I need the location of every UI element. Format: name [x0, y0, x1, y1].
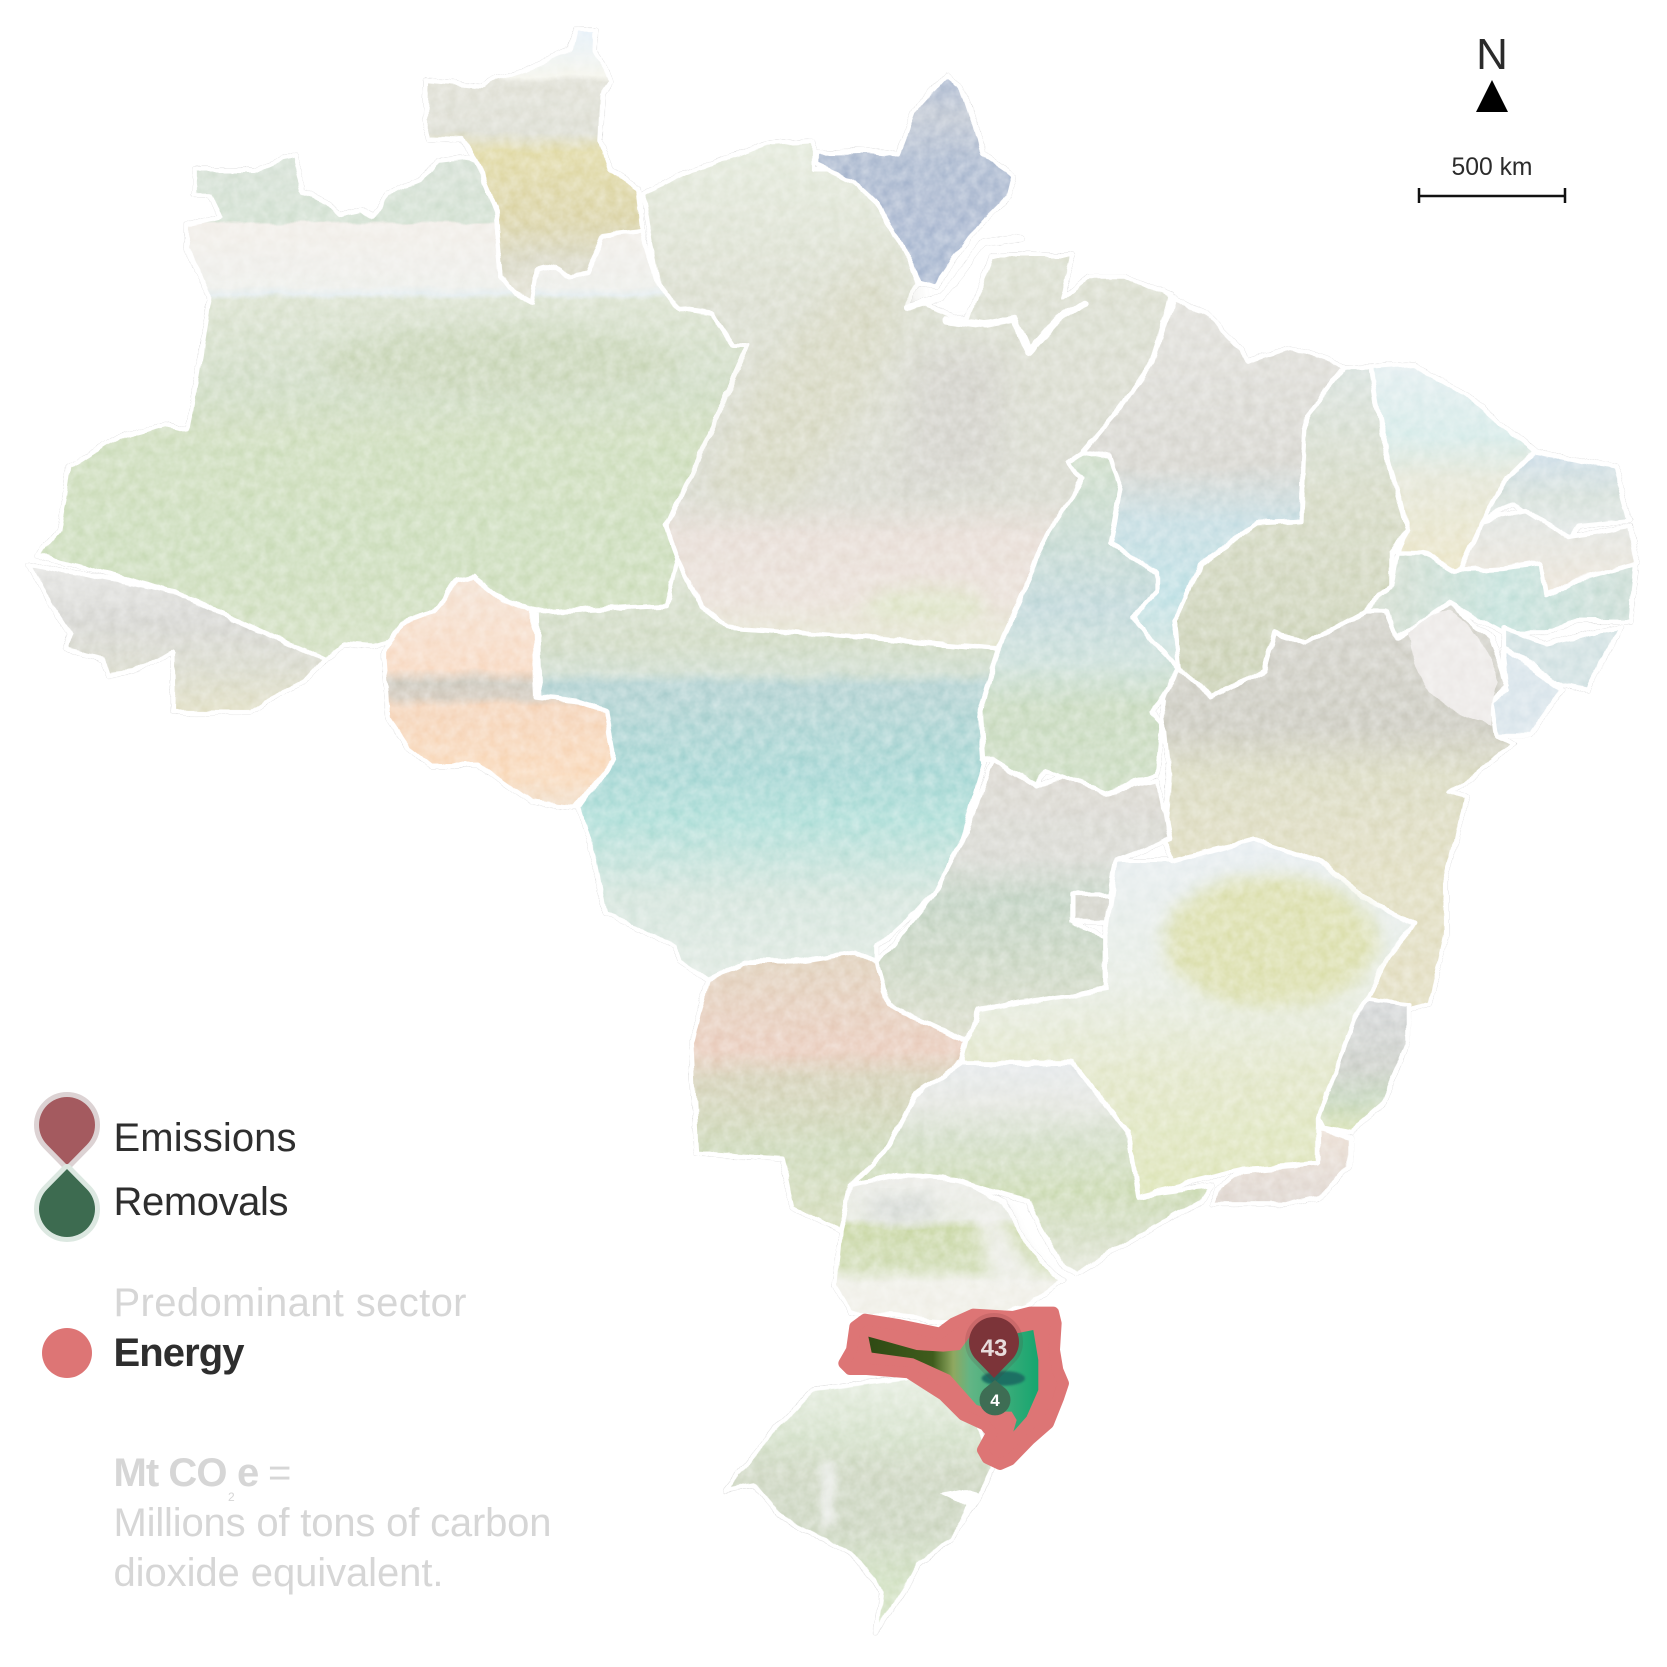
note: unit definition: =	[268, 1451, 291, 1495]
legend: removals	[39, 1169, 289, 1237]
state: Maranhao	[1083, 298, 1346, 670]
Parana detail: waterfall face	[870, 1195, 933, 1220]
Santa Catarina energy sector outline	[844, 1312, 1063, 1464]
state: Espirito Santo	[1318, 999, 1409, 1132]
state: Rio de Janeiro	[1212, 1127, 1350, 1204]
Bahia detail: pale cloud	[1408, 610, 1499, 725]
scale bar	[1419, 153, 1565, 203]
state: Mato Grosso	[537, 558, 998, 980]
state: Amazonas	[37, 156, 749, 659]
state: Tocantins	[979, 452, 1179, 792]
Santa Catarina dark water shadow	[982, 1371, 1025, 1386]
state: Roraima	[424, 29, 642, 303]
Rio Grande do Sul detail: lagoon	[941, 1488, 980, 1536]
state: Pernambuco	[1365, 553, 1636, 638]
Para detail: tree trunk shadow	[893, 351, 1005, 510]
state: Piaui	[1174, 367, 1408, 696]
state: Rio Grande do Sul	[725, 1374, 993, 1633]
legend: removals: Removals	[114, 1180, 288, 1224]
state: Amapa	[816, 74, 1014, 287]
scale bar: 500 km	[1452, 153, 1532, 181]
state: Mato Grosso do Sul	[691, 951, 967, 1233]
state: Alagoas	[1503, 627, 1620, 691]
legend: energy sector	[42, 1328, 245, 1378]
Parana detail: white falls on the right	[973, 1207, 1042, 1281]
map pin: Santa Catarina emissions: 43	[981, 1335, 1007, 1362]
Para detail: undergrowth	[861, 587, 989, 625]
Para coast: Marajo white channels	[906, 239, 1084, 351]
state: Parana	[835, 1175, 1063, 1324]
note: unit definition: Millions of tons of carbon	[114, 1501, 552, 1545]
legend heading: predominant sector: Predominant sector	[114, 1281, 466, 1325]
note: unit definition: dioxide equivalent.	[114, 1551, 444, 1595]
state: Rondonia	[384, 576, 613, 808]
legend: emissions: Emissions	[114, 1116, 296, 1160]
Rio Grande do Sul detail: waterfall	[821, 1462, 836, 1526]
Amazonas detail: darker canopy band	[319, 327, 680, 395]
north arrow	[1476, 30, 1508, 112]
highlighted state: Santa Catarina	[844, 1312, 1063, 1464]
map pin: Santa Catarina removals: 4	[990, 1391, 1000, 1410]
state: Para	[642, 140, 1170, 648]
Para detail: mossy tree buttress	[702, 250, 898, 505]
state: Bahia	[1158, 603, 1515, 1010]
north arrow: N	[1476, 30, 1508, 79]
legend: emissions	[39, 1097, 296, 1165]
note: unit definition: e	[237, 1451, 259, 1495]
Minas Gerais detail: yellow tree canopy	[1164, 875, 1377, 1007]
state: Acre	[29, 563, 324, 712]
state: Ceara	[1370, 364, 1535, 571]
state: Goias	[877, 760, 1169, 1042]
state: Federal District	[1072, 895, 1110, 922]
note: unit definition: Mt CO	[114, 1451, 228, 1495]
state: Paraiba	[1461, 510, 1638, 595]
state: Rio Grande do Norte	[1482, 452, 1631, 542]
note: unit definition: 2	[228, 1490, 235, 1504]
map pin: Santa Catarina emissions	[969, 1317, 1019, 1378]
state: Minas Gerais	[962, 840, 1414, 1196]
note: unit definition	[114, 1451, 552, 1595]
legend: energy sector: Energy	[114, 1331, 245, 1375]
state: Sergipe	[1493, 648, 1562, 736]
state: Sao Paulo	[850, 1063, 1212, 1276]
map pin: Santa Catarina removals	[979, 1380, 1010, 1415]
Santa Catarina photo interior	[868, 1330, 1038, 1432]
